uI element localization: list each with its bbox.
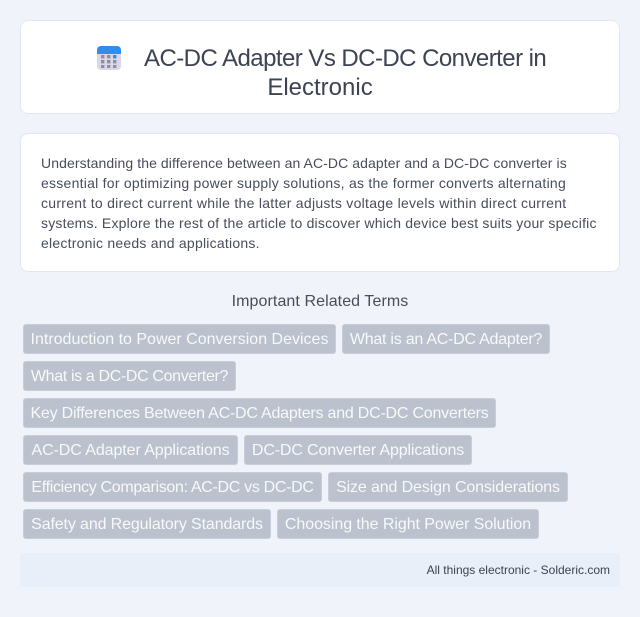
title — [144, 45, 546, 101]
tag: DC-DC Converter Applications — [252, 442, 464, 459]
intro panel — [20, 133, 620, 272]
tag — [23, 398, 496, 428]
tag — [342, 324, 550, 354]
tag — [23, 435, 238, 465]
footer bar — [20, 553, 620, 587]
tag: Efficiency Comparison: AC-DC vs DC-DC — [31, 479, 314, 496]
icon: calendar — [97, 46, 121, 70]
tag: What is an AC-DC Adapter? — [350, 331, 542, 348]
intro text — [41, 155, 597, 251]
tag — [23, 509, 271, 539]
title card — [20, 20, 620, 114]
related terms tags — [23, 324, 568, 539]
tag — [23, 472, 322, 502]
tag: What is a DC-DC Converter? — [31, 368, 228, 385]
intro text: electronic needs and applications. — [41, 235, 260, 251]
text: Electronic — [267, 74, 373, 101]
tag — [277, 509, 539, 539]
intro text: systems. Explore the rest of the article to discover which device best suits your specific — [41, 215, 597, 231]
tag — [23, 361, 236, 391]
tag — [328, 472, 568, 502]
text: AC-DC Adapter Vs DC-DC Converter in — [144, 45, 546, 72]
intro text: essential for optimizing power supply solutions, as the former converts alternating — [41, 175, 566, 191]
tag — [244, 435, 472, 465]
tag: Key Differences Between AC-DC Adapters and DC-DC Converters — [30, 405, 489, 422]
footer text: All things electronic - Solderic.com — [427, 563, 610, 577]
tag — [23, 324, 336, 354]
intro text: current to direct current while the latter adjusts voltage levels within direct current — [41, 195, 566, 211]
tag: Safety and Regulatory Standards — [31, 516, 263, 533]
tag: Choosing the Right Power Solution — [285, 516, 531, 533]
tag: Size and Design Considerations — [336, 479, 560, 496]
intro text: Understanding the difference between an AC-DC adapter and a DC-DC converter is — [41, 155, 567, 171]
tag: AC-DC Adapter Applications — [31, 442, 230, 459]
tag: Introduction to Power Conversion Devices — [31, 331, 328, 348]
related terms heading: Important Related Terms — [232, 293, 408, 310]
